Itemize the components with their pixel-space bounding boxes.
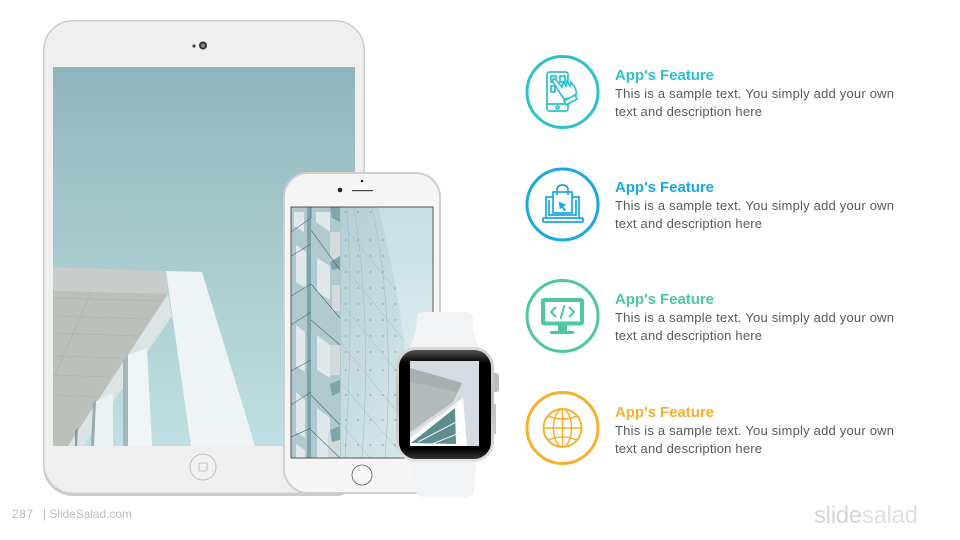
description: [615, 310, 894, 343]
tablet screen photo: [53, 67, 355, 446]
tablet home button: [190, 454, 216, 480]
icon: code monitor: [527, 280, 598, 352]
phone glass facade grid: [340, 208, 404, 458]
feature 4: [527, 392, 894, 464]
heading: App's Feature: [615, 67, 714, 84]
watch crown: [492, 373, 499, 434]
phone home button: [352, 465, 372, 485]
watch device: [396, 312, 499, 497]
watch screen photo: [410, 361, 479, 446]
watch strap: [408, 312, 481, 497]
description: [615, 198, 894, 231]
description: text and description here: [615, 328, 762, 343]
description: [615, 86, 894, 119]
icon: laptop with shopping bag: [527, 169, 598, 240]
phone screen photo: [291, 207, 433, 458]
description: text and description here: [615, 441, 762, 456]
feature 3: [527, 280, 894, 352]
description: text and description here: [615, 104, 762, 119]
description: This is a sample text. You simply add your own: [615, 198, 894, 213]
description: This is a sample text. You simply add your own: [615, 310, 894, 325]
footer page number and site: 287: [12, 507, 33, 521]
tablet camera: [192, 42, 207, 50]
footer page number and site: | SlideSalad.com: [43, 507, 132, 521]
feature 1: [527, 56, 894, 128]
feature 2: [527, 169, 894, 240]
description: This is a sample text. You simply add your own: [615, 86, 894, 101]
description: This is a sample text. You simply add your own: [615, 423, 894, 438]
description: text and description here: [615, 216, 762, 231]
heading: App's Feature: [615, 291, 714, 308]
icon: globe: [527, 392, 598, 464]
icon: phone with tapping hand: [527, 56, 598, 128]
description: [615, 423, 894, 456]
phone device: [283, 172, 441, 494]
heading: App's Feature: [615, 404, 714, 421]
footer logo: slidesalad: [814, 502, 918, 529]
tablet device: [43, 20, 365, 496]
heading: App's Feature: [615, 179, 714, 196]
phone camera and speaker: [338, 180, 373, 192]
